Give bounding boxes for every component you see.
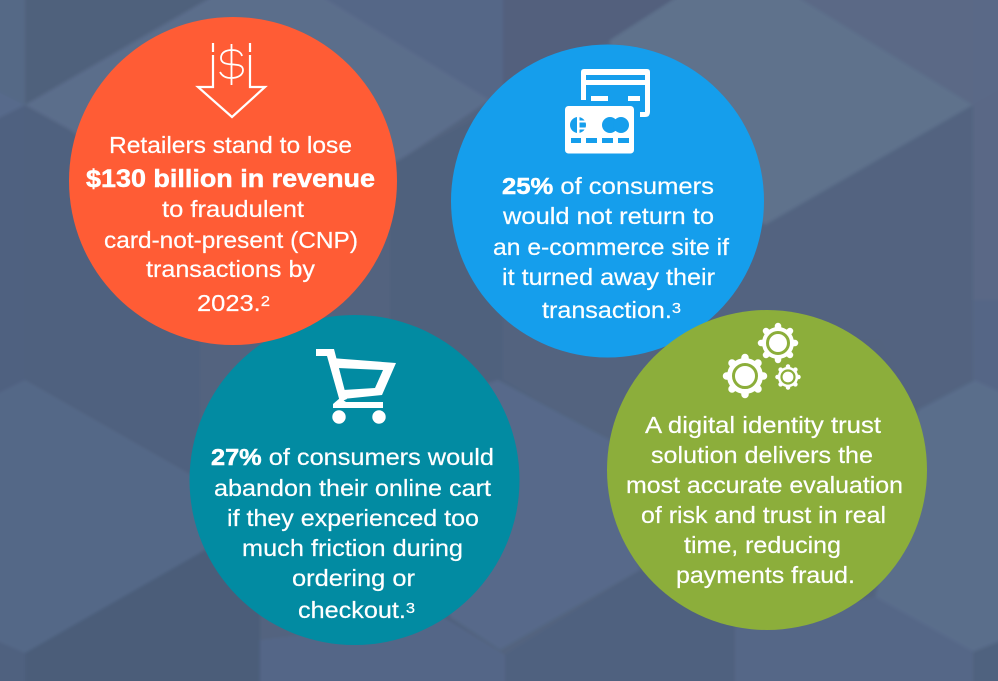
text: cart abandonment [211, 444, 494, 623]
text: cart abandonment: much friction during [242, 535, 463, 561]
panel: return rate (blue circle) [451, 44, 764, 358]
text: cart abandonment: ordering or [292, 565, 415, 591]
text: revenue loss: card-not-present (CNP) [104, 227, 358, 253]
panel: cart abandonment (teal circle) [190, 315, 520, 645]
text: revenue loss: Retailers stand to lose [109, 132, 352, 158]
text: return rate [493, 173, 730, 323]
panel: revenue loss (red circle) [69, 17, 397, 345]
text: digital identity [626, 412, 903, 588]
text: revenue loss: 2023. [197, 290, 255, 316]
icon: dollar sign with down arrow [198, 43, 265, 117]
text: revenue loss: 2 [261, 293, 270, 310]
icon: small gear [778, 366, 798, 388]
text: return rate: would not return to [502, 203, 714, 229]
text: revenue loss: transactions by [146, 256, 316, 282]
text: revenue loss: to fraudulent [162, 196, 305, 222]
text: return rate: transaction. [542, 297, 661, 323]
text: return rate: it turned away their [502, 264, 715, 290]
text: digital identity: solution delivers the [651, 442, 873, 468]
text: return rate: an e-commerce site if [493, 234, 730, 260]
text: revenue loss: $130 billion in revenue [86, 165, 375, 193]
text: digital identity: most accurate evaluation [626, 472, 903, 498]
text: revenue loss [86, 132, 375, 316]
text: cart abandonment: abandon their online cart [214, 475, 492, 501]
text: digital identity: time, reducing [684, 532, 841, 558]
icon: top gear [761, 326, 795, 360]
icon: credit cards [565, 69, 650, 154]
text: cart abandonment: if they experienced too [227, 505, 479, 531]
text: return rate: 3 [672, 300, 681, 317]
icon: shopping cart [316, 349, 396, 424]
text: cart abandonment: 3 [406, 600, 415, 617]
icon: gears [726, 326, 798, 394]
panel: digital identity solution (green circle) [607, 310, 927, 630]
text: return rate: 25% of consumers [502, 173, 714, 199]
text: digital identity: A digital identity trust [645, 412, 882, 438]
text: cart abandonment: checkout. [298, 597, 396, 623]
text: digital identity: payments fraud. [676, 562, 855, 588]
text: digital identity: of risk and trust in real [641, 502, 886, 528]
icon: large gear [726, 358, 764, 394]
text: cart abandonment: 27% of consumers would [211, 444, 494, 470]
